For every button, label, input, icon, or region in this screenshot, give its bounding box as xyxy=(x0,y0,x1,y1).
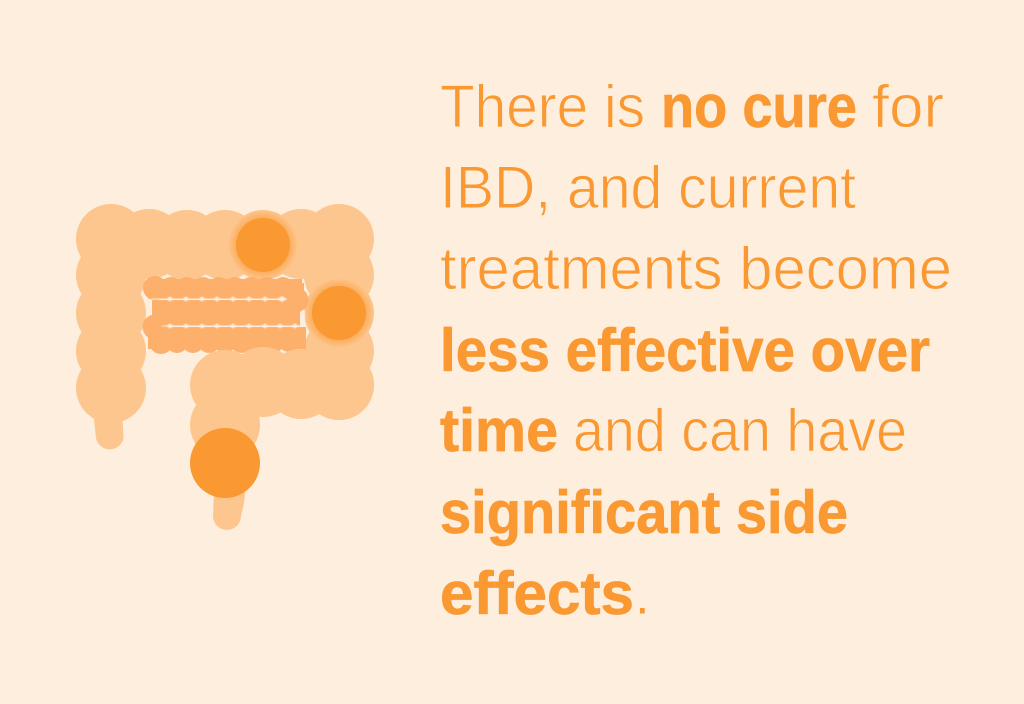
text block: time xyxy=(440,397,558,464)
inflammation spot: top xyxy=(228,210,298,280)
inflammation spot: bottom xyxy=(190,428,260,498)
text block: for xyxy=(872,73,944,140)
large intestine: bottom row xyxy=(190,347,374,460)
small intestine xyxy=(142,276,308,354)
text block: There is xyxy=(440,73,645,140)
text block: IBD, and current xyxy=(440,154,856,221)
text block: no cure xyxy=(661,73,857,140)
text block: treatments become xyxy=(440,235,952,302)
icon: intestines xyxy=(76,204,374,530)
inflammation spot: right xyxy=(304,278,374,348)
text block: and can have xyxy=(573,397,907,464)
text block xyxy=(440,73,952,627)
text block: less effective over xyxy=(440,317,930,384)
large intestine: left and top and right xyxy=(76,204,374,530)
text block: effects xyxy=(440,560,634,627)
text block: significant side xyxy=(440,479,848,546)
gaps between small intestine loops xyxy=(146,296,305,328)
text block: . xyxy=(634,560,651,627)
